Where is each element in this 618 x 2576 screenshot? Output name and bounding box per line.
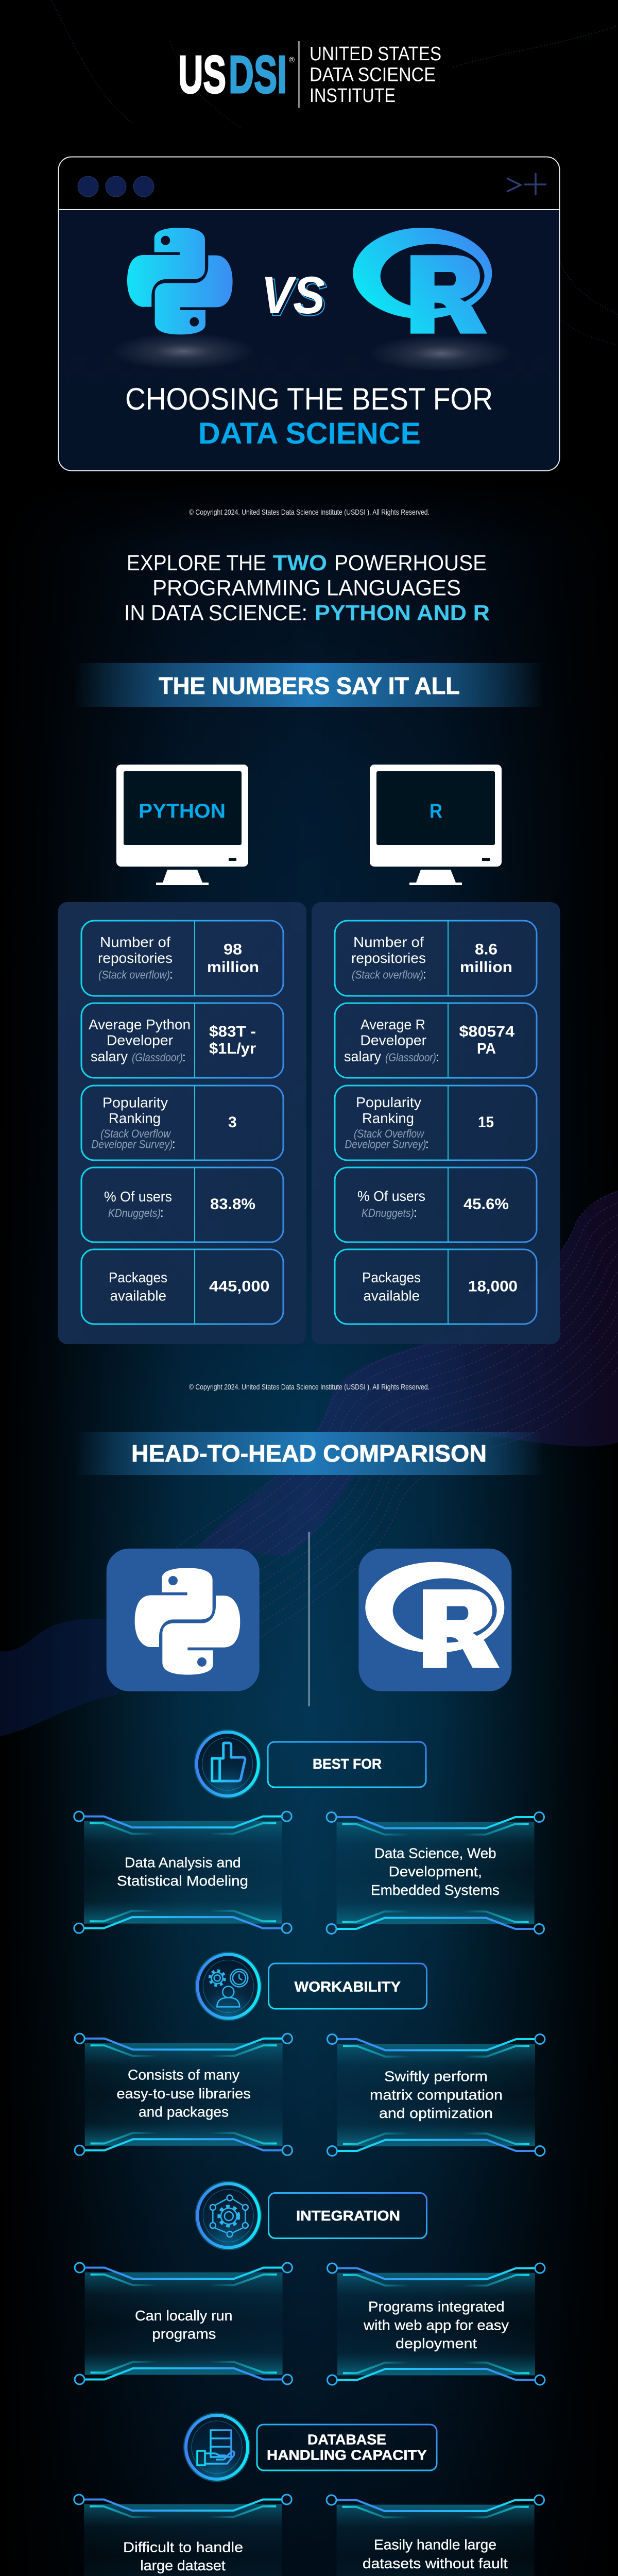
row: repositories: Number of [353,934,424,950]
row: repositories: : [423,968,426,982]
row: repositories: repositories [351,950,426,966]
copyright: © Copyright 2024. United States Data Science Institute (USDSI ). All Rights Reserved. [189,1383,430,1392]
panel: R: Swiftly perform [384,2069,488,2084]
row: packages: 18,000 [468,1278,518,1295]
heading: explore [124,551,490,625]
row: popularity: Ranking [362,1110,414,1126]
panel: python: easy-to-use libraries [116,2086,251,2102]
icon: R tile [358,1549,511,1691]
row: users: 45.6% [464,1196,509,1213]
row: salary: (Glassdoor) [385,1051,436,1064]
banner: head-to-head comparison [75,1432,544,1475]
row: users [335,1167,537,1242]
row: packages [81,1249,283,1324]
icon: vs: VS [263,268,327,327]
heading: explore: POWERHOUSE [334,551,487,575]
row: popularity: Ranking [109,1110,161,1126]
panel: R [327,1812,544,1934]
row: repositories: million [460,959,512,976]
label: WORKABILITY [295,1978,401,1995]
icon: gear network [195,2181,262,2250]
section: workability [75,1952,545,2156]
row: repositories [335,921,537,996]
panel: python: Can locally run [135,2308,233,2324]
label: BEST FOR [313,1756,382,1772]
row: salary: $83T - [209,1023,256,1040]
icon: window dots [78,176,154,197]
panel: python stats [58,902,306,1344]
title: CHOOSING THE BEST FOR [125,382,493,416]
row: salary: $80574 [459,1023,514,1040]
panel: python [75,2263,293,2384]
logo: USDSI [178,41,441,108]
row: repositories: (Stack overflow) [98,969,170,981]
heading: explore: PROGRAMMING LANGUAGES [152,576,461,601]
row: popularity: Popularity [356,1094,421,1110]
label: HANDLING CAPACITY [267,2447,427,2463]
row: users: KDnuggets) [108,1207,161,1219]
row: repositories: Number of [100,934,170,950]
icon: python monitor [116,765,248,885]
panel: python: and packages [139,2104,229,2120]
row: packages: 445,000 [209,1278,270,1295]
label [269,2193,426,2238]
row: users: KDnuggets) [362,1207,414,1219]
row: popularity [335,1086,537,1160]
row: salary: salary [344,1048,381,1064]
row: users: 83.8% [210,1196,255,1213]
row: repositories: (Stack overflow) [352,969,423,981]
label: DATABASE [307,2431,386,2447]
row: packages: Packages [362,1269,421,1285]
panel: python: Difficult to handle [123,2539,243,2555]
row: popularity: Developer Survey) [92,1138,173,1151]
row: popularity: Popularity [102,1094,168,1111]
banner: the numbers say it all [75,663,544,707]
row: users: % Of users [104,1189,172,1205]
banner: head-to-head comparison: HEAD-TO-HEAD COMPARISON [131,1440,487,1467]
row: packages [335,1249,537,1324]
panel: python [74,1811,291,1933]
label [257,2425,437,2470]
row: salary: Average R [360,1016,425,1032]
title: DATA SCIENCE [198,417,421,450]
row: repositories: repositories [98,950,173,966]
icon: R logo [353,228,492,334]
icon: chevron and plus [507,173,546,195]
row: popularity: : [425,1138,429,1151]
label: INTEGRATION [296,2208,400,2224]
row: repositories: : [169,968,173,982]
panel: R [328,2263,545,2385]
icon: R monitor [370,765,502,885]
row: users: % Of users [357,1188,425,1204]
panel: python [74,2495,291,2576]
panel: R [328,2034,545,2156]
logo: USDSI: DATA SCIENCE [310,64,436,86]
icon: thumbs up [194,1729,261,1799]
row: popularity: Developer Survey) [345,1138,426,1151]
panel: R: and optimization [379,2105,493,2121]
row: salary: salary [91,1048,128,1064]
row: popularity: : [172,1138,176,1151]
heading: explore: IN DATA SCIENCE: [124,601,307,625]
panel: hero browser window [59,157,559,471]
panel: R: datasets without fault [363,2555,508,2571]
icon: R shadow [369,335,513,372]
label [269,1963,426,2009]
row: users: : [414,1206,417,1220]
section: best for [74,1729,544,1934]
row: users: : [160,1206,164,1220]
row: users [81,1167,283,1242]
panel: R stats [312,902,560,1344]
panel: R: Data Science, Web [374,1845,496,1861]
panel: python: large dataset [140,2557,226,2573]
icon: python tile [107,1549,260,1691]
row: packages: available [364,1288,420,1303]
row: salary [335,1003,537,1078]
row: repositories: million [207,959,259,976]
row: packages: available [110,1288,166,1303]
row: salary: $1L/yr [209,1040,256,1057]
icon: R monitor: R [430,800,442,822]
logo: USDSI: US [178,45,226,104]
banner: the numbers say it all: THE NUMBERS SAY IT ALL [159,672,460,699]
section: integration [75,2181,545,2385]
icon: gear clock person [195,1952,262,2021]
copyright: © Copyright 2024. United States Data Science Institute (USDSI ). All Rights Reserved. [189,508,430,517]
row: salary: PA [477,1040,496,1057]
panel: R: Development, [389,1863,482,1879]
row: salary: Developer [360,1032,426,1048]
panel: R: deployment [396,2335,477,2351]
icon: python logo [127,228,233,334]
logo: USDSI: INSTITUTE [310,85,396,107]
row: popularity: (Stack Overflow [354,1127,425,1140]
panel: python: Statistical Modeling [117,1873,248,1889]
row: salary: Developer [107,1032,173,1048]
row: salary [81,1003,283,1078]
heading: explore: TWO [273,551,327,575]
panel: R: Easily handle large [374,2537,496,2552]
row: packages: Packages [109,1269,167,1285]
row: salary: : [182,1050,186,1064]
logo: USDSI: UNITED STATES [310,43,441,65]
panel: python: programs [152,2326,216,2342]
icon: python shadow [111,333,255,370]
panel: R: Programs integrated [368,2299,505,2315]
row: popularity: (Stack Overflow [100,1127,171,1140]
panel: python: Data Analysis and [125,1855,241,1870]
row: repositories: 98 [224,941,242,958]
icon: database in hand [183,2412,250,2482]
row: repositories [81,921,283,996]
logo: USDSI: DSI [229,45,287,104]
row: popularity [81,1086,283,1160]
row: salary: : [436,1050,439,1064]
panel: python [75,2033,293,2155]
row: popularity: 3 [228,1114,237,1131]
icon: python monitor: PYTHON [139,800,226,822]
panel: R: Embedded Systems [371,1882,500,1898]
row: repositories: 8.6 [475,941,497,958]
logo: USDSI: ® [289,56,295,64]
label [268,1742,426,1787]
section: database handling capacity [74,2412,544,2576]
row: salary: Average Python [89,1016,191,1032]
panel: R: matrix computation [370,2087,503,2103]
panel: python: Consists of many [128,2067,239,2082]
heading: explore: EXPLORE THE [127,551,266,575]
panel: R: with web app for easy [363,2317,509,2333]
row: salary: (Glassdoor) [132,1051,183,1064]
title [125,382,493,450]
icon: vs: VS [261,266,325,325]
row: popularity: 15 [478,1114,494,1131]
panel: R [327,2495,544,2576]
heading: explore: PYTHON AND R [315,601,490,625]
